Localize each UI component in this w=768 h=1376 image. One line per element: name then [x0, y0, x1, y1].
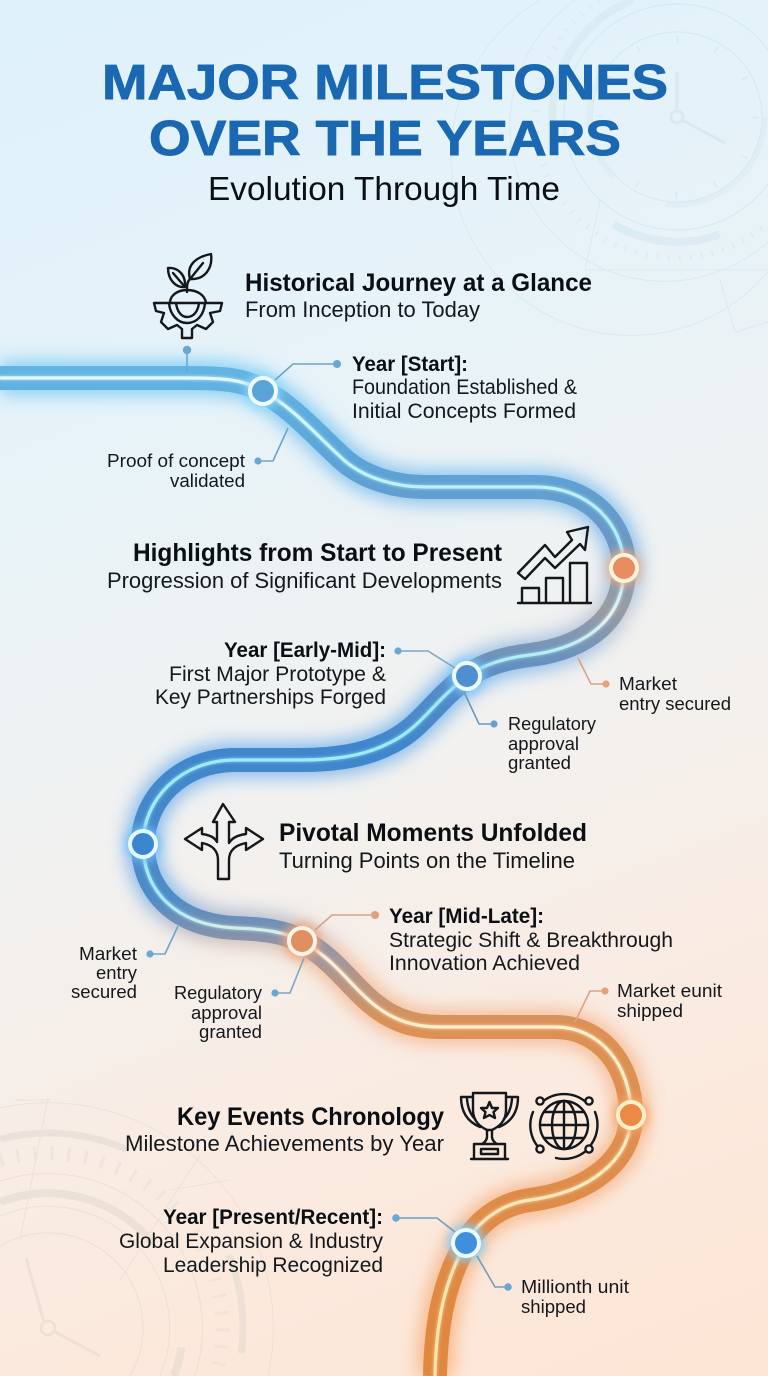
note: proof of concept: Proof of concept: [107, 451, 245, 471]
note: market entry secured left: [71, 926, 178, 1002]
icon: globe: [530, 1094, 597, 1159]
heading: highlights: Highlights from Start to Present: [133, 539, 503, 567]
note: proof of concept: validated: [170, 471, 245, 491]
note: market entry secured left: secured: [71, 982, 137, 1002]
note: market entry secured left: entry: [96, 963, 137, 983]
milestone: early-mid: First Major Prototype &: [169, 663, 386, 686]
milestone: year start: Year [Start]:: [352, 353, 468, 376]
milestone: mid-late: Innovation Achieved: [389, 952, 580, 975]
note: regulatory approval left: approval: [191, 1003, 262, 1023]
milestone: early-mid: [155, 639, 484, 709]
node: orange upper: [607, 551, 641, 585]
connector: icon to ribbon: [184, 347, 190, 372]
milestone: present: Leadership Recognized: [163, 1254, 383, 1277]
milestone: mid-late: Strategic Shift & Breakthrough: [389, 929, 673, 952]
note: millionth unit: shipped: [521, 1297, 586, 1317]
milestone: present: [119, 1206, 484, 1277]
milestone: year start: [246, 353, 577, 423]
note: millionth unit: [477, 1256, 629, 1317]
note: regulatory approval right: approval: [508, 734, 579, 754]
milestone: early-mid: Year [Early-Mid]:: [224, 639, 386, 662]
background clock: bottom left: [0, 1098, 273, 1376]
background clock: top right: [451, 0, 768, 335]
note: market entry secured right: entry secured: [619, 694, 731, 714]
milestone: year start: Foundation Established &: [352, 376, 577, 399]
heading: key events: Key Events Chronology: [177, 1103, 444, 1131]
note: regulatory approval left: Regulatory: [174, 983, 262, 1003]
icon: growth chart: [518, 527, 591, 603]
heading: pivotal moments: [279, 819, 587, 873]
heading: key events: Milestone Achievements by Year: [125, 1131, 444, 1156]
note: millionth unit: Millionth unit: [521, 1277, 629, 1297]
icon: trophy: [461, 1093, 518, 1159]
note: market eunit shipped: [575, 981, 722, 1022]
note: market eunit shipped: Market eunit: [617, 981, 722, 1001]
heading: historical journey: Historical Journey at a Glance: [245, 269, 592, 297]
icon: sprout and gear: [154, 254, 222, 338]
heading: highlights: Progression of Significant Developments: [107, 568, 502, 593]
heading: historical journey: From Inception to Today: [245, 297, 480, 322]
title: [102, 56, 668, 166]
title: MAJOR MILESTONES: [102, 56, 668, 110]
node: [450, 659, 484, 693]
note: regulatory approval left: [174, 958, 304, 1042]
heading: pivotal moments: Pivotal Moments Unfolded: [279, 819, 587, 847]
node: [284, 923, 320, 959]
milestone: present: Year [Present/Recent]:: [163, 1206, 383, 1229]
note: regulatory approval right: [464, 692, 596, 773]
heading: historical journey: [245, 269, 592, 322]
note: regulatory approval right: granted: [508, 753, 571, 773]
title: OVER THE YEARS: [149, 112, 621, 166]
note: market entry secured right: [578, 658, 731, 714]
note: market entry secured left: Market: [79, 944, 137, 964]
subtitle: Evolution Through Time: [208, 170, 560, 207]
icon: branching arrows: [185, 804, 263, 879]
heading: key events: [125, 1103, 444, 1156]
milestone: present: Global Expansion & Industry: [119, 1230, 383, 1253]
note: market entry secured right: Market: [619, 674, 677, 694]
note: market eunit shipped: shipped: [617, 1001, 683, 1021]
node: [246, 374, 280, 408]
note: proof of concept: [107, 428, 288, 491]
milestone: mid-late: Year [Mid-Late]:: [389, 905, 544, 928]
milestone: mid-late: [284, 905, 673, 975]
note: regulatory approval right: Regulatory: [508, 714, 596, 734]
note: regulatory approval left: granted: [199, 1022, 262, 1042]
node: blue left: [126, 827, 160, 861]
node: [448, 1225, 484, 1261]
milestone: year start: Initial Concepts Formed: [352, 400, 576, 423]
heading: highlights: [107, 539, 503, 593]
timeline ribbon: [0, 378, 631, 1376]
node: orange right: [614, 1098, 648, 1132]
heading: pivotal moments: Turning Points on the Timeline: [279, 848, 575, 873]
milestone: early-mid: Key Partnerships Forged: [155, 686, 386, 709]
